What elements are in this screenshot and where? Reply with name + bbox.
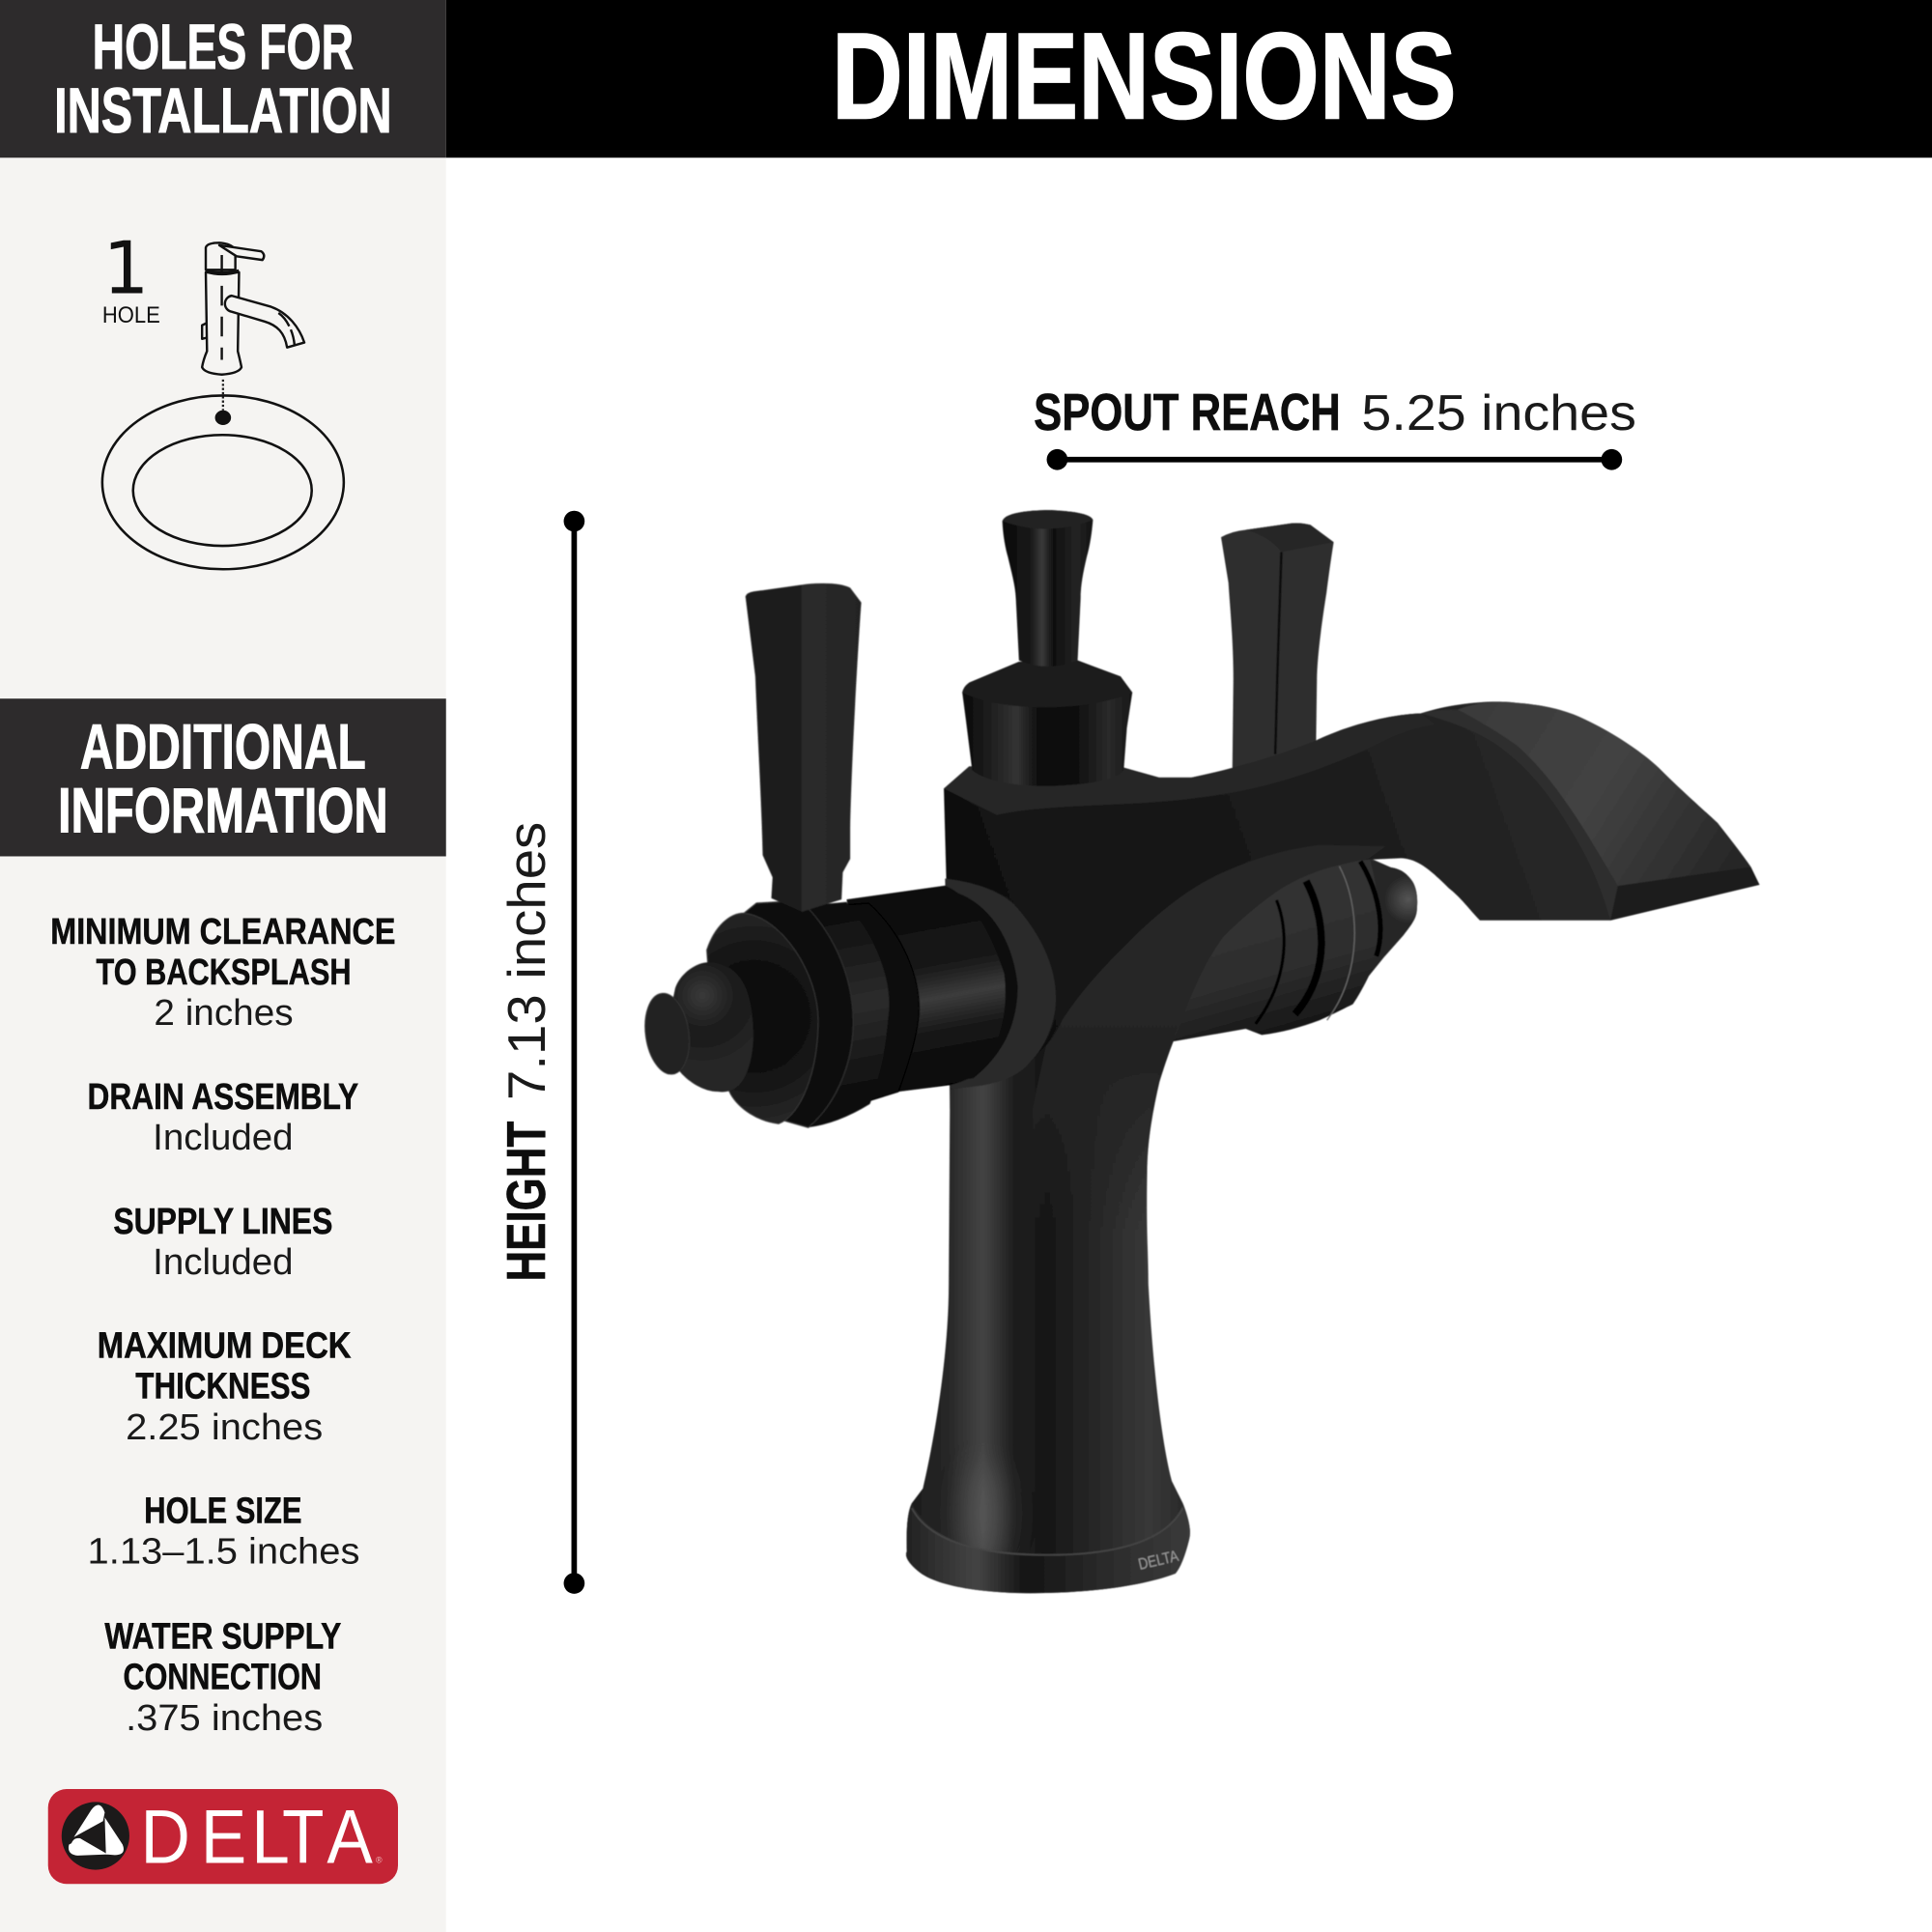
- panel: one hole installation diagram: [102, 226, 344, 569]
- spec: water supply connection: CONNECTION: [124, 1657, 322, 1698]
- neck and base: [906, 845, 1385, 1593]
- icon: sink with mounting hole: [102, 380, 344, 569]
- hole count label: 1: [103, 226, 149, 311]
- spec: minimum clearance: [50, 911, 395, 1034]
- spec: drain assembly: DRAIN ASSEMBLY: [88, 1076, 358, 1118]
- heading: holes for installation: INSTALLATION: [54, 75, 392, 147]
- spec: drain assembly: [88, 1076, 358, 1158]
- spec: minimum clearance: 2 inches: [154, 992, 294, 1034]
- dimension: spout reach: [1034, 384, 1636, 470]
- spout and body upper: [944, 701, 1759, 1109]
- logo: Delta: DELTA: [140, 1794, 374, 1879]
- spec: water supply connection: WATER SUPPLY: [104, 1616, 341, 1658]
- title banner: DIMENSIONS: [832, 8, 1457, 145]
- panel: left sidebar background: [0, 0, 446, 1932]
- left valve handle hub and knob: [640, 900, 919, 1127]
- heading: additional information: ADDITIONAL: [80, 711, 366, 782]
- dimension: height: HEIGHT: [496, 1122, 556, 1282]
- heading: holes for installation: [0, 0, 446, 157]
- spout tip facet: [1610, 867, 1759, 921]
- hole count label: [102, 226, 160, 328]
- icon: line-art faucet: [202, 242, 304, 375]
- spec: hole size: 1.13–1.5 inches: [88, 1531, 359, 1573]
- spec: hole size: [88, 1491, 359, 1573]
- dimension: height: 7.13 inches: [497, 822, 556, 1100]
- spec: maximum deck thickness: [98, 1325, 352, 1448]
- spec: minimum clearance: MINIMUM CLEARANCE: [50, 911, 395, 952]
- logo: Delta: [48, 1789, 398, 1884]
- dimension: spout reach: SPOUT REACH: [1034, 384, 1341, 441]
- dimension: height: [496, 511, 584, 1594]
- heading: additional information: [0, 698, 446, 856]
- dimension: spout reach: 5.25 inches: [1361, 385, 1636, 441]
- spec: supply lines: [113, 1201, 332, 1283]
- spec: drain assembly: Included: [153, 1117, 294, 1158]
- spec: maximum deck thickness: MAXIMUM DECK: [98, 1325, 352, 1367]
- spout end facet: [1458, 702, 1750, 886]
- text block: additional information specs: [50, 911, 395, 1739]
- spec: maximum deck thickness: THICKNESS: [135, 1366, 310, 1407]
- right lever handle: [1221, 523, 1334, 788]
- spec: water supply connection: .375 inches: [126, 1697, 323, 1739]
- faucet product image: [640, 510, 1759, 1593]
- heading: holes for installation: HOLES FOR: [93, 12, 354, 83]
- spout side strip: [1421, 709, 1618, 921]
- right valve: [1146, 858, 1417, 1041]
- spec: hole size: HOLE SIZE: [144, 1491, 301, 1532]
- neck and base: DELTA: [1136, 1547, 1181, 1574]
- left lever handle: [746, 583, 862, 912]
- center soap dispenser knob: [962, 510, 1132, 786]
- title banner: [446, 0, 1932, 157]
- spec: supply lines: SUPPLY LINES: [113, 1201, 332, 1242]
- heading: additional information: INFORMATION: [58, 776, 388, 847]
- spec: minimum clearance: TO BACKSPLASH: [96, 952, 352, 993]
- logo: Delta: ®: [376, 1856, 383, 1865]
- spec: maximum deck thickness: 2.25 inches: [126, 1406, 323, 1448]
- spec: water supply connection: [104, 1616, 341, 1739]
- hole count label: HOLE: [102, 302, 160, 328]
- spec: supply lines: Included: [153, 1241, 294, 1283]
- spout top rim band: [944, 714, 1435, 815]
- left valve flange and cylinder: [846, 878, 1056, 1092]
